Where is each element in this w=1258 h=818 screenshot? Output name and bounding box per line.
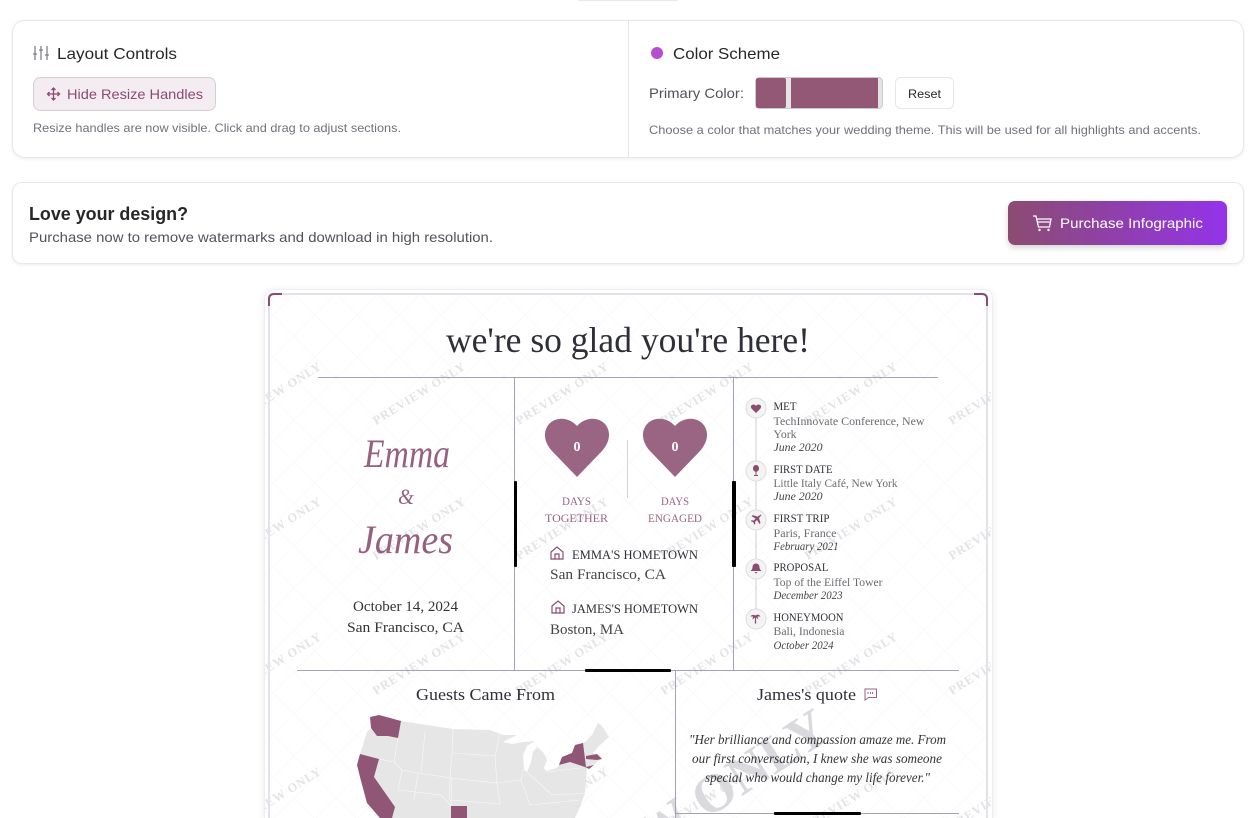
watermark pattern: PREVIEW ONLY — [946, 495, 1044, 563]
watermark pattern: PREVIEW ONLY — [513, 630, 611, 698]
milestone: first trip: February 2021 — [773, 541, 838, 553]
heading: James's quote: James's quote — [757, 685, 856, 704]
watermark pattern: PREVIEW ONLY — [370, 495, 468, 563]
watermark pattern: PREVIEW ONLY — [370, 630, 468, 698]
US map — [357, 715, 609, 818]
milestone: first date: FIRST DATE — [774, 464, 832, 476]
button: reset: Reset — [908, 87, 942, 101]
heading: love your design: Love your design? — [29, 204, 188, 224]
heading: layout controls: Layout Controls — [57, 46, 177, 63]
watermark pattern: PREVIEW ONLY — [802, 360, 900, 428]
heading: color scheme: Color Scheme — [673, 46, 780, 63]
milestone: honeymoon: HONEYMOON — [774, 612, 844, 624]
state: California — [357, 754, 395, 818]
stat: days engaged — [643, 419, 707, 525]
state: Washington — [370, 715, 401, 738]
icon: colour dot — [651, 47, 663, 59]
icon: speech bubble — [865, 689, 876, 700]
watermark pattern: PREVIEW ONLY — [658, 360, 756, 428]
state: Massachusetts — [586, 754, 602, 760]
panel: controls — [12, 20, 1244, 158]
milestone: first date — [746, 461, 898, 503]
watermark pattern: PREVIEW ONLY — [802, 495, 900, 563]
milestone: met: June 2020 — [774, 442, 823, 454]
milestone: honeymoon: October 2024 — [774, 640, 834, 652]
milestone: proposal: Top of the Eiffel Tower — [774, 577, 883, 589]
title: we're so glad you're here! — [446, 320, 810, 360]
state: New Mexico — [451, 806, 467, 818]
hometown: James: Boston, MA — [550, 622, 624, 638]
heading: guests came from: Guests Came From — [416, 685, 555, 704]
wedding date and place: October 14, 2024 — [353, 599, 459, 615]
watermark pattern: PREVIEW ONLY — [513, 495, 611, 563]
state: New York — [559, 743, 594, 769]
corner accents — [269, 294, 987, 306]
button: reset — [896, 78, 954, 108]
milestone: met: TechInnovate Conference, New — [774, 416, 925, 428]
hometown: Emma: San Francisco, CA — [550, 567, 666, 583]
watermark pattern: PREVIEW ONLY — [946, 630, 1044, 698]
timeline — [746, 398, 925, 652]
hometown: James — [550, 601, 699, 638]
note: color scheme: Choose a color that matches your wedding theme. This will be used for all highlights and accents. — [649, 123, 1201, 137]
panel: purchase banner — [12, 182, 1244, 264]
stat: days engaged: 0 — [672, 440, 678, 455]
quote text: special who would change my life forever." — [705, 771, 930, 786]
milestone: met — [746, 398, 925, 454]
watermark pattern: PREVIEW ONLY — [658, 630, 756, 698]
stat: days together — [545, 419, 609, 525]
hometown: Emma — [550, 547, 699, 583]
button: hide resize handles — [34, 78, 216, 110]
couple names: & — [398, 484, 415, 509]
watermark pattern: PREVIEW ONLY — [370, 360, 468, 428]
milestone: first trip: Paris, France — [774, 528, 836, 540]
milestone: proposal — [746, 559, 883, 602]
milestone: met: York — [774, 429, 797, 441]
couple names: James — [358, 517, 453, 562]
text: purchase prompt: Purchase now to remove watermarks and download in high resolution. — [29, 229, 493, 245]
quote text — [689, 733, 946, 786]
milestone: honeymoon — [746, 609, 844, 652]
stat: days together: DAYS — [562, 496, 591, 508]
watermark pattern: PREVIEW ONLY — [226, 360, 324, 428]
milestone: first date: June 2020 — [774, 491, 823, 503]
couple names — [358, 431, 453, 562]
panel: infographic card — [264, 289, 994, 818]
note: resize handles: Resize handles are now visible. Click and drag to adjust sections. — [33, 121, 401, 135]
watermark pattern — [265, 362, 991, 818]
top tab — [578, 0, 678, 2]
quote text: "Her brilliance and compassion amaze me. From — [689, 733, 946, 748]
milestone: proposal: December 2023 — [773, 590, 843, 602]
watermark pattern: PREVIEW ONLY — [802, 630, 900, 698]
hometown: James: JAMES'S HOMETOWN — [572, 601, 699, 616]
colour swatch — [756, 78, 882, 108]
icon: sliders — [33, 46, 49, 60]
watermark pattern: PREVIEW ONLY — [513, 360, 611, 428]
watermark pattern: PREVIEW ONLY — [658, 495, 756, 563]
hometown: Emma: EMMA'S HOMETOWN — [572, 547, 699, 562]
button: purchase infographic: Purchase Infographic — [1060, 215, 1203, 231]
wedding date and place — [347, 599, 464, 636]
stat: days together: 0 — [574, 440, 580, 455]
milestone: proposal: PROPOSAL — [774, 562, 828, 574]
button: hide resize handles: Hide Resize Handles — [67, 86, 203, 102]
wedding date and place: San Francisco, CA — [347, 620, 464, 636]
button: purchase infographic — [1008, 201, 1227, 245]
map base — [357, 721, 609, 818]
watermark pattern: PREVIEW ONLY — [226, 495, 324, 563]
milestone: first trip — [746, 510, 838, 553]
stat: days engaged: ENGAGED — [648, 513, 702, 525]
milestone: met: MET — [774, 401, 796, 413]
quote text: our first conversation, I knew she was someone — [692, 752, 942, 767]
watermark pattern: PREVIEW ONLY — [946, 360, 1044, 428]
milestone: honeymoon: Bali, Indonesia — [774, 626, 844, 638]
couple names: Emma — [363, 431, 450, 476]
milestone: first date: Little Italy Café, New York — [774, 478, 898, 490]
watermark pattern: PREVIEW ONLY — [226, 630, 324, 698]
stat: days together: TOGETHER — [545, 513, 608, 525]
stat: days engaged: DAYS — [661, 496, 689, 508]
milestone: first trip: FIRST TRIP — [774, 513, 830, 525]
label: primary color: Primary Color: — [649, 85, 744, 101]
